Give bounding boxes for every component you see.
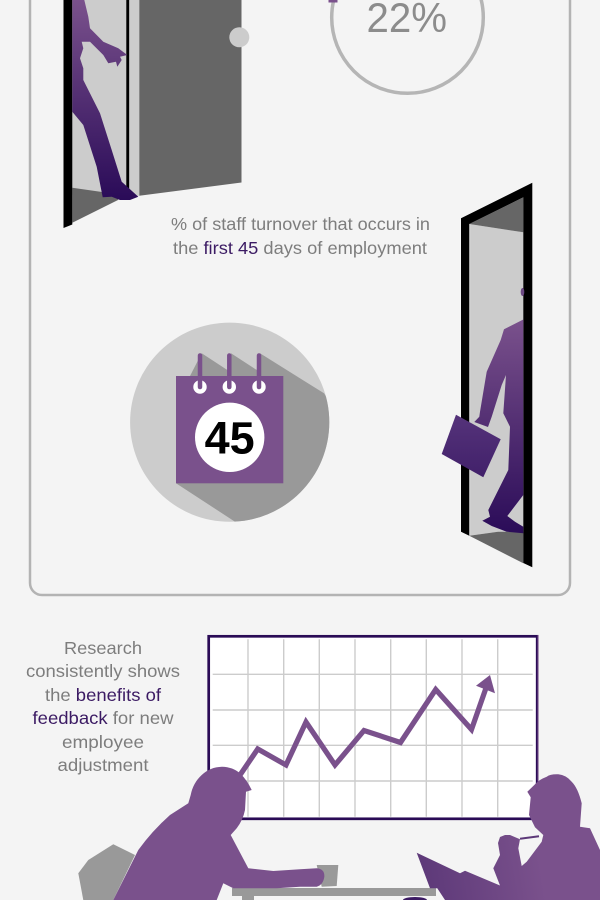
text block: research on feedback: Research bbox=[64, 638, 142, 658]
chart: rising line on presentation board bbox=[209, 635, 538, 820]
text block: staff turnover stat: the first 45 days of employment bbox=[173, 238, 427, 258]
illustration: man leaving through open door bbox=[64, 0, 249, 228]
text block: research on feedback: the benefits of bbox=[45, 685, 161, 705]
ring progress marker bbox=[328, 0, 338, 2]
text block: research on feedback: feedback for new bbox=[32, 708, 174, 728]
illustration: table and cup bbox=[232, 865, 436, 900]
text block: research on feedback: adjustment bbox=[58, 755, 149, 775]
panel: staff turnover bbox=[30, 0, 570, 595]
stat ring: 22% bbox=[328, 0, 483, 93]
text block: research on feedback bbox=[26, 638, 180, 775]
text block: staff turnover stat: % of staff turnover that occurs in bbox=[171, 214, 430, 234]
text block: research on feedback: employee bbox=[62, 732, 144, 752]
icon: calendar showing 45 days: 45 bbox=[205, 412, 255, 463]
illustration: chair bbox=[78, 844, 135, 900]
text block: staff turnover stat bbox=[171, 214, 430, 258]
arrow head bbox=[476, 675, 495, 693]
illustration: seated man on the right with clipboard bbox=[403, 774, 600, 900]
chair edge bbox=[403, 897, 427, 900]
text block: research on feedback: consistently shows bbox=[26, 661, 180, 681]
illustration: man entering through door with briefcase bbox=[442, 183, 532, 567]
illustration: seated man on the left bbox=[113, 767, 324, 900]
trend line bbox=[238, 688, 486, 778]
icon: calendar showing 45 days bbox=[130, 323, 335, 522]
pen bbox=[520, 836, 539, 839]
